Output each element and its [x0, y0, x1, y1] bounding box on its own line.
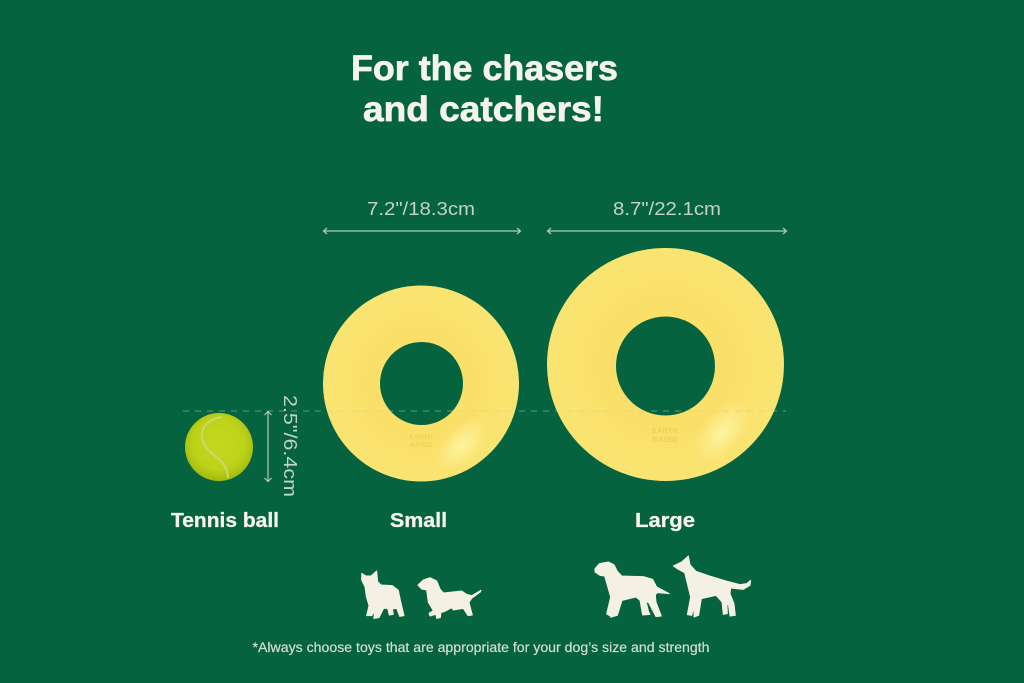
small yellow ring toy [323, 286, 519, 482]
large yellow ring toy: EARTH [652, 426, 678, 435]
size labels [171, 510, 695, 532]
icon: labrador [595, 562, 669, 617]
icon: french bulldog [362, 571, 404, 618]
small yellow ring toy: RATED [410, 442, 432, 449]
large yellow ring toy: RATED [652, 435, 678, 444]
icon: dachshund [418, 578, 481, 618]
small yellow ring toy: EARTH [410, 434, 432, 441]
dashed reference line [183, 410, 786, 412]
large toy width measurement [548, 198, 786, 234]
small toy width measurement [324, 198, 520, 234]
size labels: Large [635, 510, 695, 532]
icon: shepherd dog [673, 556, 751, 617]
title [351, 49, 618, 129]
large toy width measurement: 8.7"/22.1cm [613, 198, 721, 219]
small toy width measurement: 7.2"/18.3cm [367, 198, 475, 219]
title: and catchers! [363, 90, 604, 129]
size labels: Small [390, 510, 447, 532]
large yellow ring toy [547, 248, 784, 481]
size labels: Tennis ball [171, 510, 279, 532]
tennis ball icon [185, 413, 253, 481]
tennis ball height measurement [264, 395, 300, 497]
tennis ball height measurement: 2.5"/6.4cm [280, 395, 300, 497]
footnote: *Always choose toys that are appropriate for your dog’s size and strength [252, 640, 710, 655]
title: For the chasers [351, 49, 618, 88]
